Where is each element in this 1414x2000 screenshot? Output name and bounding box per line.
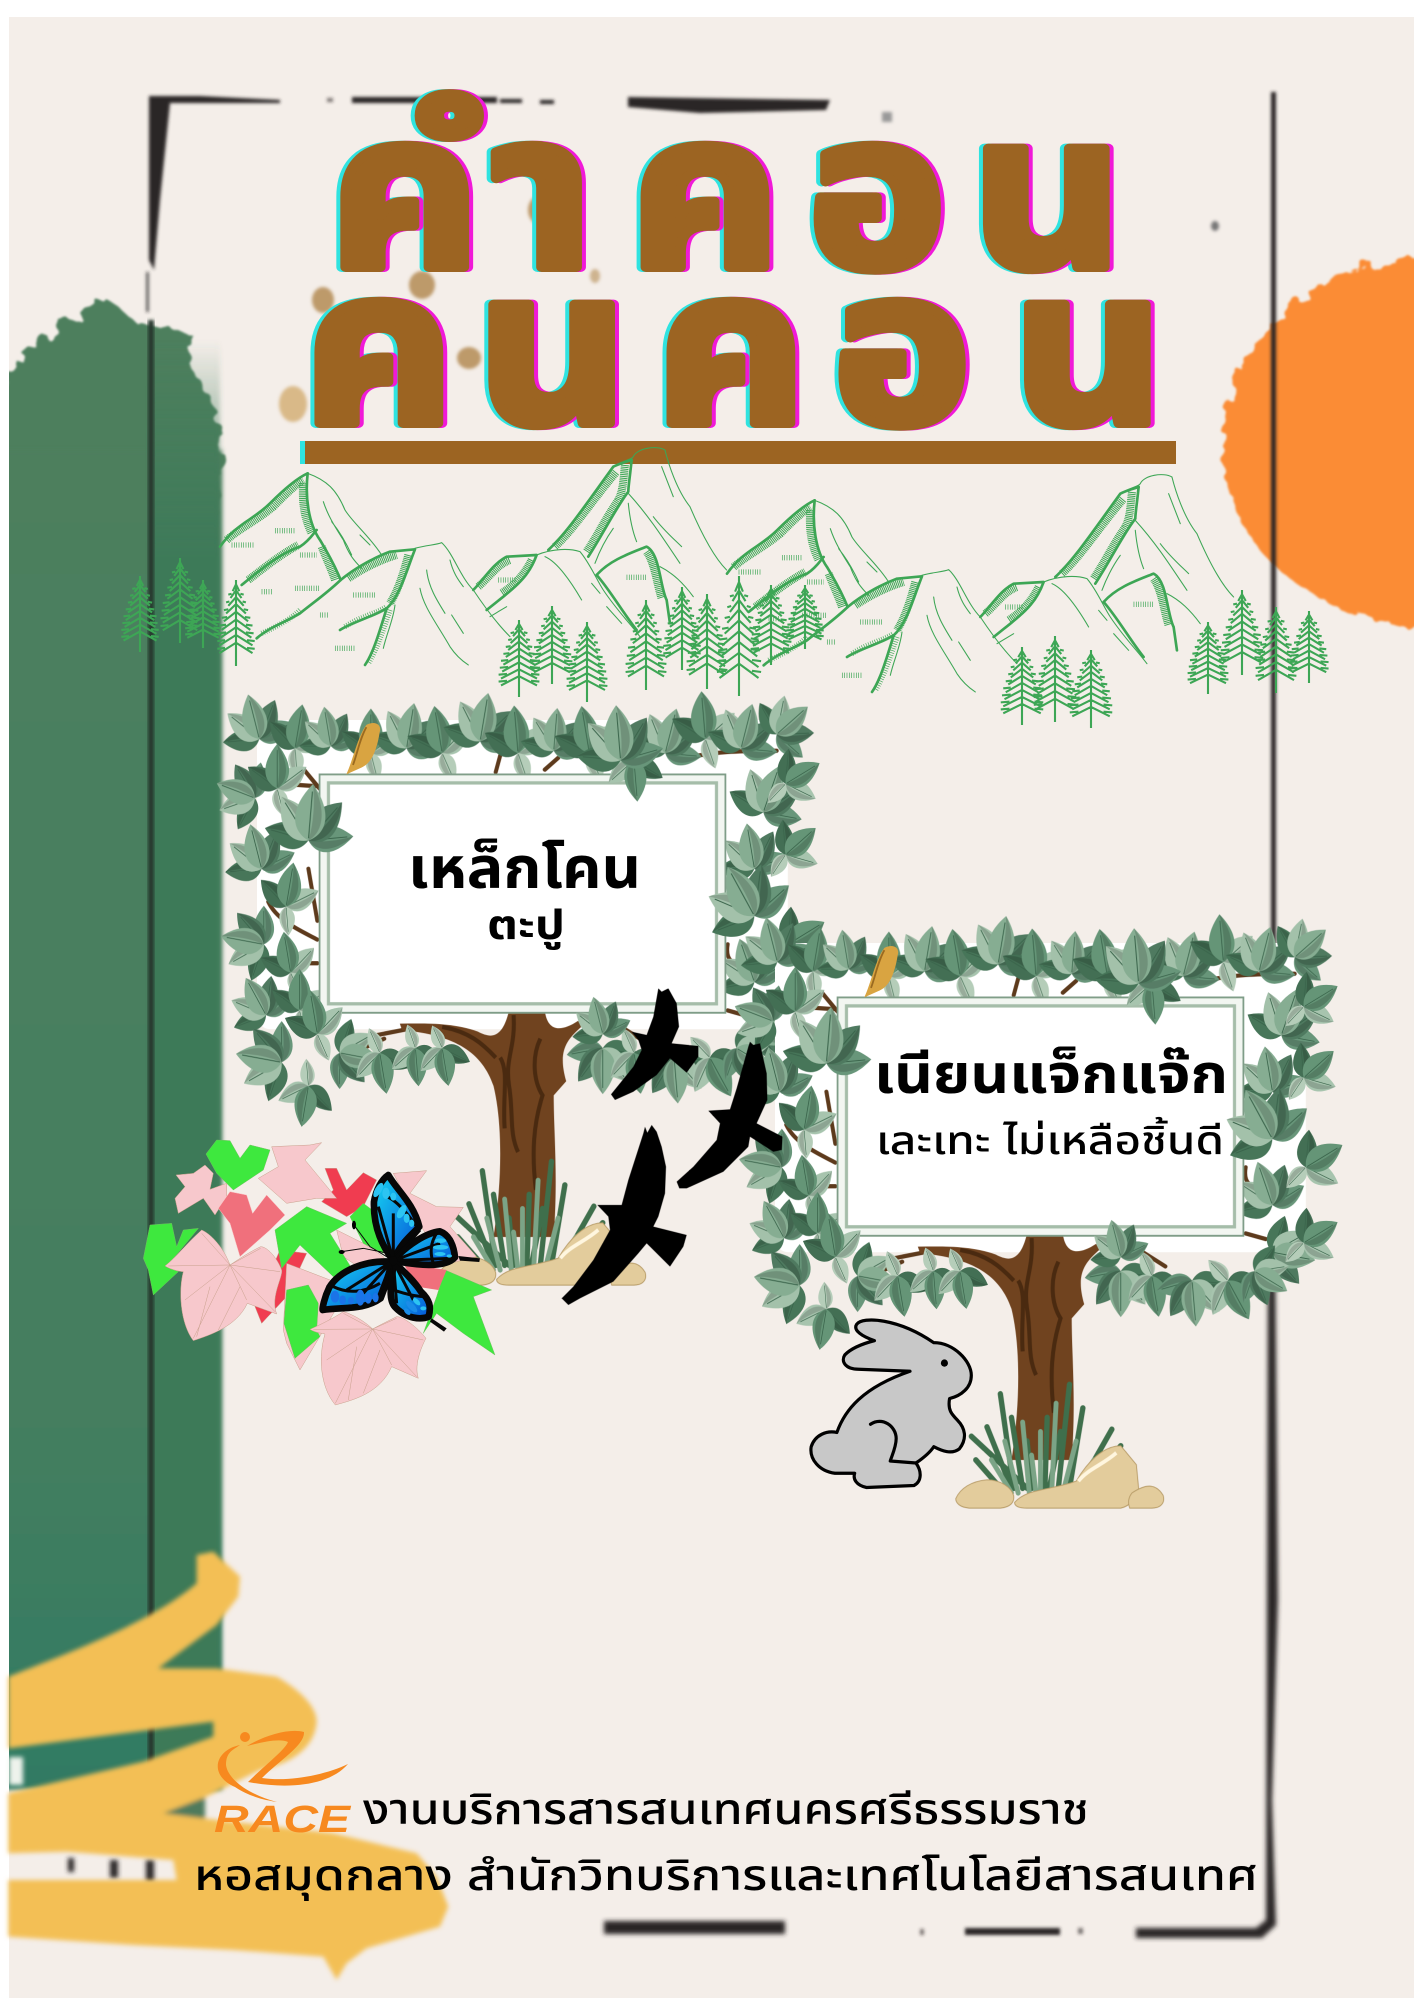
rocks <box>438 1223 646 1285</box>
trunk <box>400 1010 581 1237</box>
mountains left half <box>220 448 727 665</box>
illustration: grey rabbit <box>811 1320 971 1488</box>
decoration: yellow brush scribble <box>8 1552 448 1980</box>
decoration: brown paint specks <box>279 195 1219 422</box>
crown leaves behind the sign <box>205 678 842 1133</box>
small songbird <box>346 723 380 774</box>
decoration: green brush block <box>0 297 222 1790</box>
decoration: orange paint blob <box>1222 258 1414 628</box>
illustration: blue butterfly <box>323 1175 480 1332</box>
mountains right half <box>727 475 1234 692</box>
title underline <box>300 441 1176 464</box>
title line 2: คนคอน <box>303 227 1164 469</box>
title <box>303 71 1164 469</box>
meaning: ตะปู: ตะปู <box>487 902 565 950</box>
logo: RACE <box>214 1731 352 1841</box>
illustration: pine trees <box>121 558 1329 728</box>
footer line 2: หอสมุดกลาง สำนักวิทบริการและเทศโนโลยีสารสนเทศ <box>194 1852 1258 1901</box>
logo swoosh <box>218 1731 348 1802</box>
illustration: green mountain range <box>220 448 1234 692</box>
meaning: เละเทะ ไม่เหลือชิ้นดี: เละเทะ ไม่เหลือชิ้นดี <box>876 1116 1224 1163</box>
title line 1: คำคอน <box>329 71 1123 313</box>
tree signboard 1: เหล็กโคน <box>205 678 842 1285</box>
footer line 1: งานบริการสารสนเทศนครศรีธรรมราช <box>363 1786 1089 1834</box>
bird top <box>611 988 698 1100</box>
bird bottom <box>562 1125 687 1305</box>
word: เหล็กโคน: เหล็กโคน <box>408 836 641 901</box>
illustration: black flying birds <box>562 988 783 1305</box>
leaves overlapping the sign <box>261 701 801 1070</box>
tree artwork copy <box>723 901 1360 1508</box>
word: เนียนแจ็กแจ๊ก: เนียนแจ็กแจ๊ก <box>874 1045 1228 1105</box>
grass <box>453 1161 603 1270</box>
tree signboard 2: เนียนแจ็กแจ๊ก <box>723 901 1360 1508</box>
bird right <box>677 1042 783 1188</box>
sign board <box>320 774 725 1013</box>
illustration: caladium leaves <box>143 1140 495 1405</box>
decoration: rough dark frame <box>68 92 1278 1938</box>
tree artwork <box>205 678 842 1285</box>
logo wordmark: RACE <box>214 1799 352 1841</box>
